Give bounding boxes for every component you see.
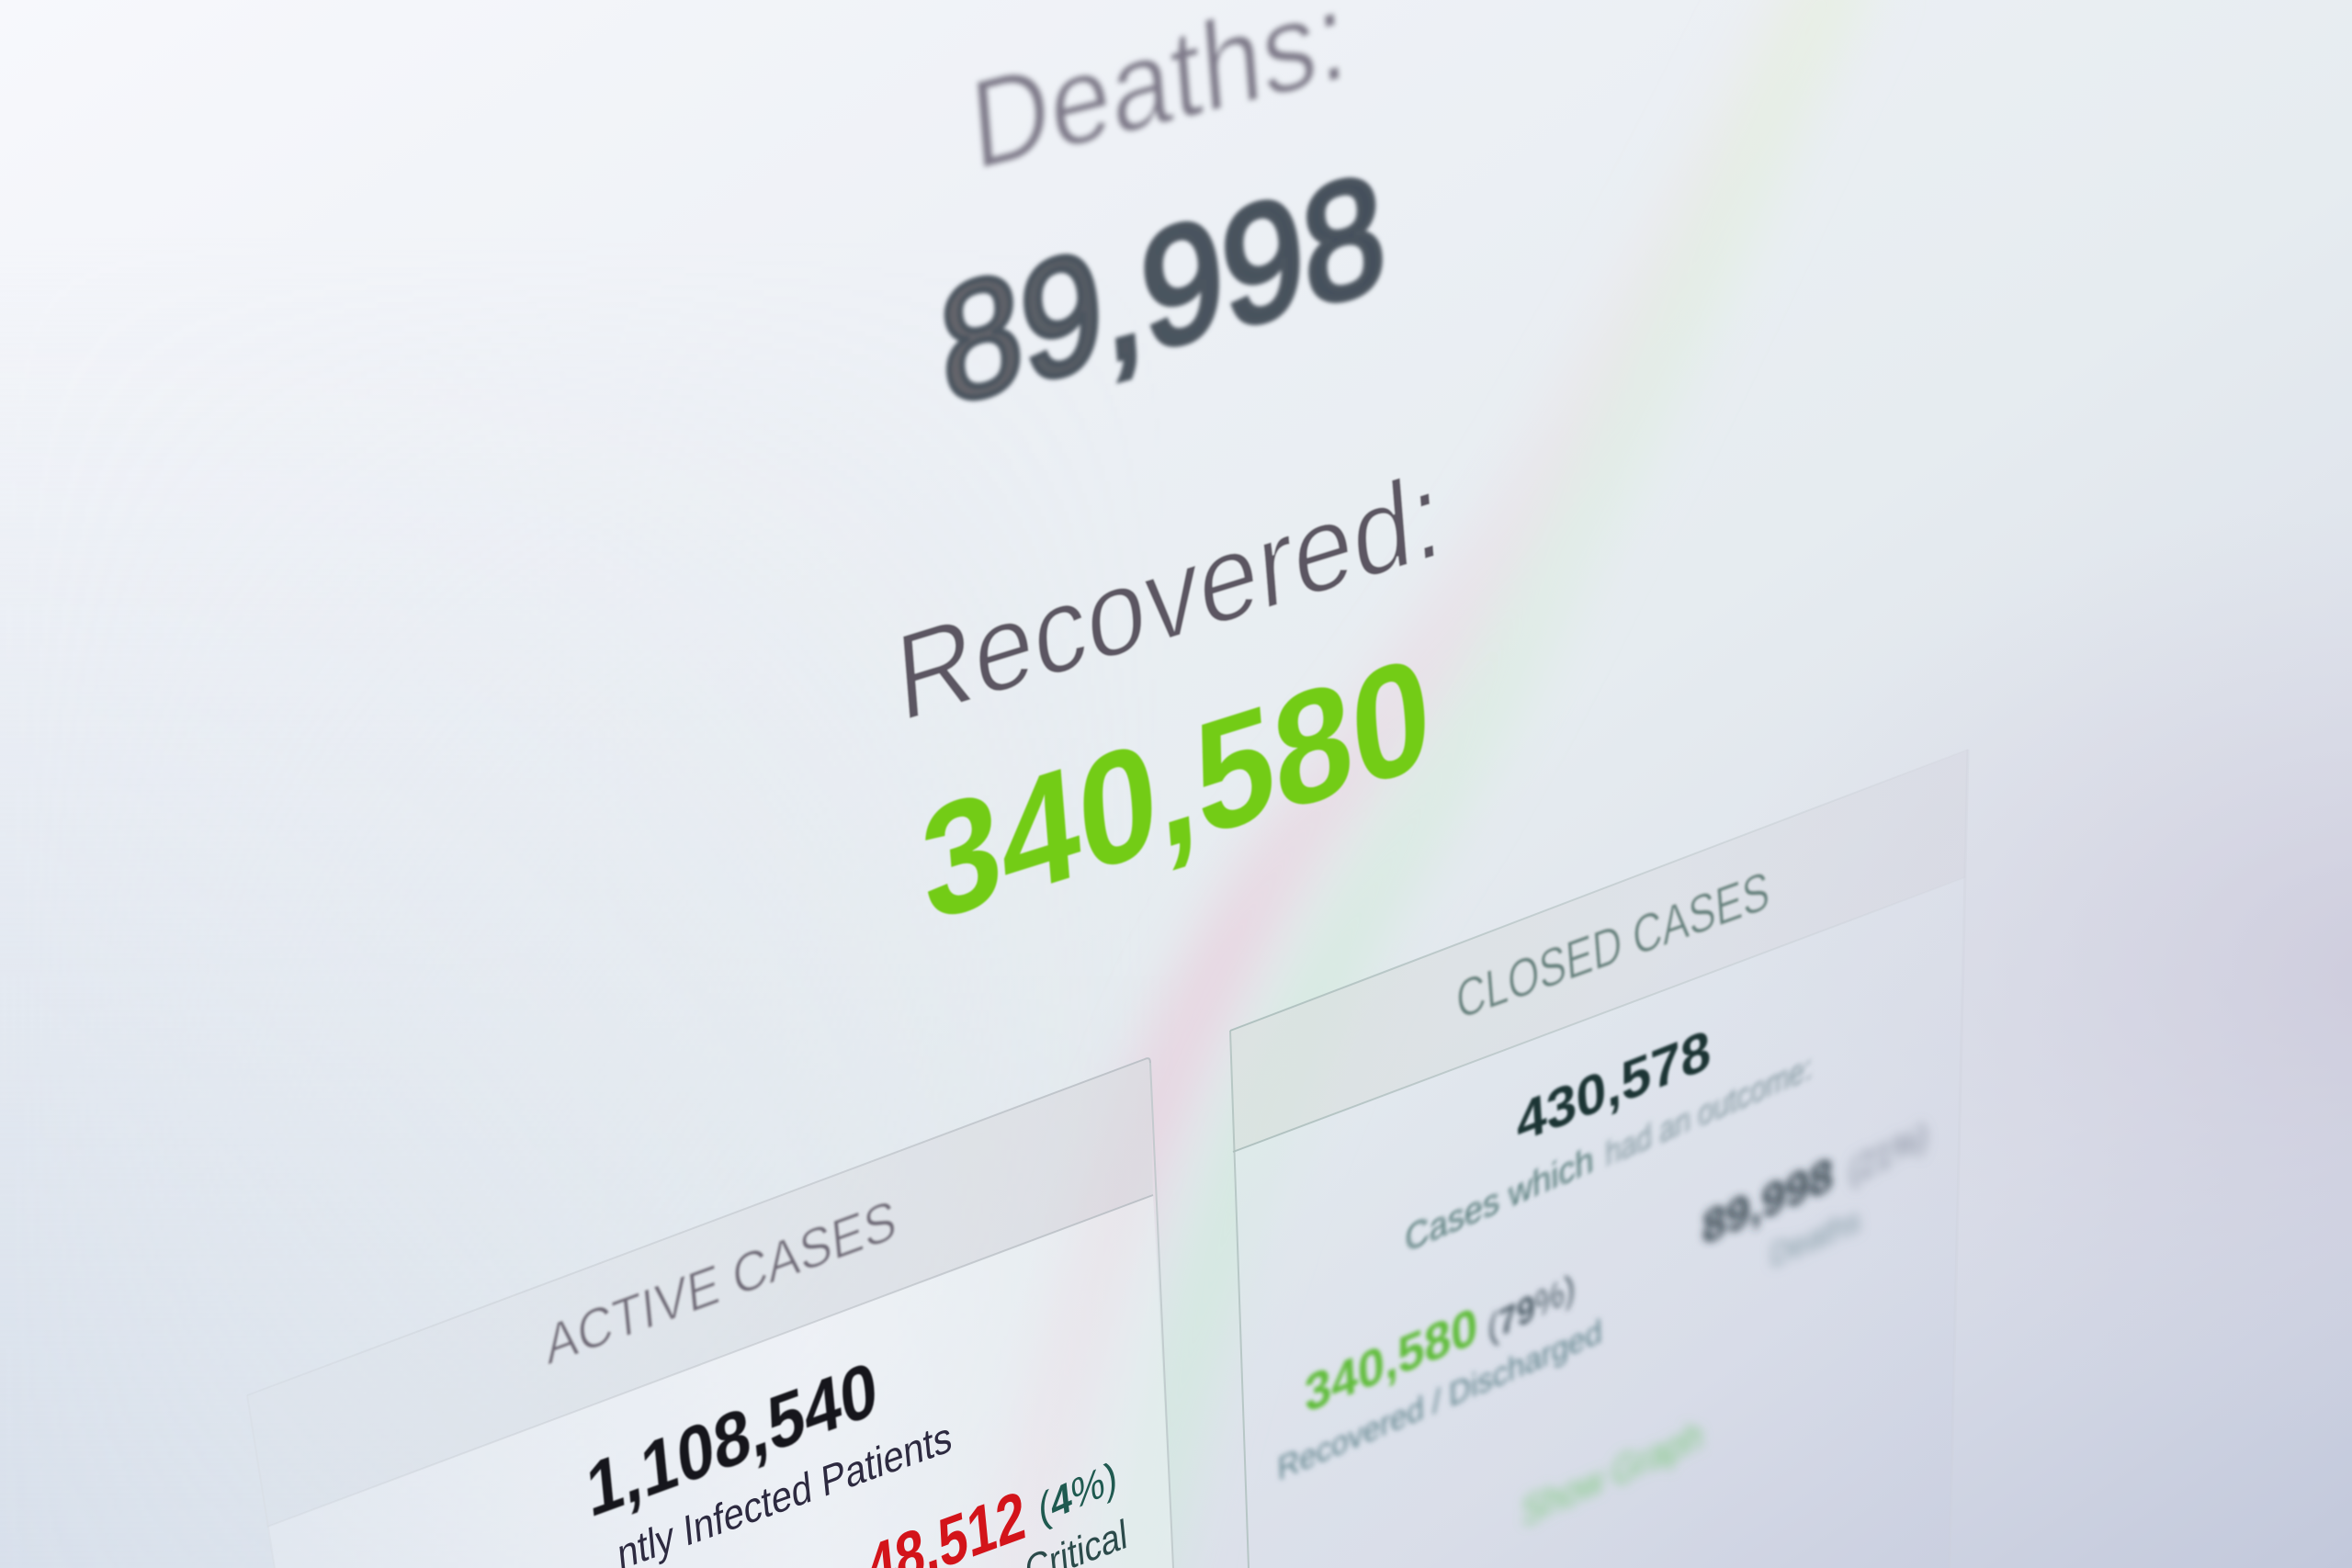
heading: Recovered: Recovered: [891, 444, 1446, 748]
active cases title: ACTIVE CASES [543, 1188, 899, 1378]
active cases body [267, 1195, 1173, 1568]
deaths label small: Deaths [1770, 1200, 1860, 1275]
number: recovered count: 340,580 [916, 621, 1437, 956]
deaths percent small: (21%) [1849, 1113, 1928, 1192]
recovered count small: 340,580 [1304, 1296, 1479, 1424]
outcome label [1405, 1047, 1813, 1260]
outcome label: had an outcome: [1605, 1047, 1813, 1175]
outcome label: Cases which [1405, 1138, 1594, 1260]
closed cases body [1233, 877, 1965, 1568]
rainbow moire band [1020, 0, 1838, 1568]
active cases total: 1,108,540 [583, 1344, 881, 1533]
critical percent: (4%) [1036, 1452, 1119, 1534]
recovered label small: Recovered / Discharged [1277, 1312, 1602, 1488]
active cases header bar [247, 1057, 1153, 1527]
show graph link: Show Graph [1522, 1411, 1702, 1536]
closed cases title: CLOSED CASES [1454, 859, 1771, 1032]
recovered percent small: (79%) [1487, 1266, 1576, 1349]
panel: active cases [247, 1057, 1173, 1568]
number: deaths count: 89,998 [933, 139, 1391, 440]
panel: closed cases [1230, 750, 1968, 1568]
closed cases total: 430,578 [1515, 1019, 1713, 1155]
deaths count small: 89,998 [1702, 1148, 1833, 1255]
closed cases header bar [1230, 750, 1968, 1152]
